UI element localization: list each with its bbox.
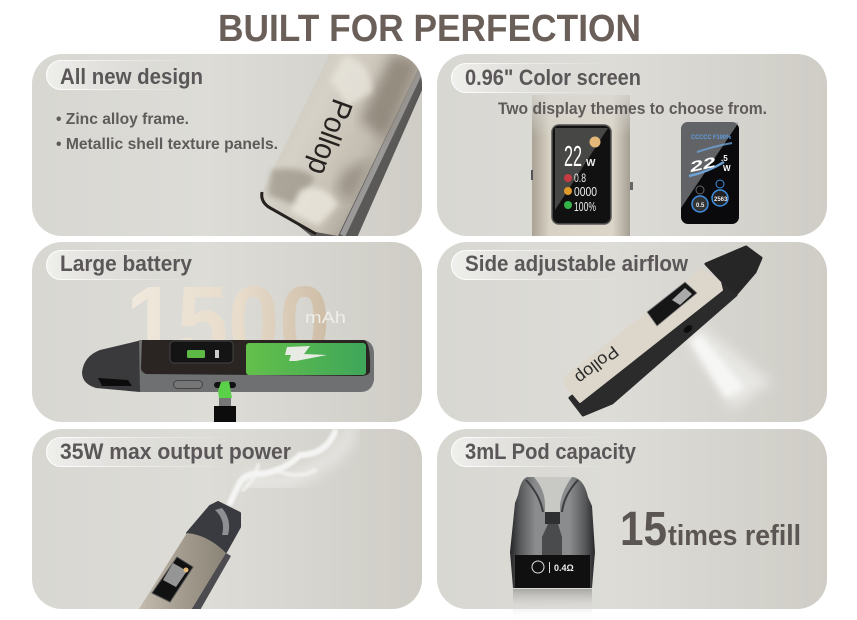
usb connector	[214, 381, 236, 422]
callout: 15 times refill	[620, 503, 801, 556]
device: angled side view	[564, 247, 761, 415]
pod	[510, 477, 595, 588]
air stream	[686, 325, 772, 410]
heading pill: output: 35W max output power	[60, 439, 291, 464]
big number 1500: 1500	[126, 266, 330, 378]
screen: theme two	[681, 122, 739, 224]
bolt icon	[285, 346, 327, 361]
device photo: shell close-up	[262, 50, 430, 240]
heading pill: color screen: 0.96" Color screen	[465, 65, 641, 90]
logo: Pollop	[301, 95, 358, 179]
screen: theme one: W	[586, 158, 596, 169]
callout: 15 times refill: times refill	[668, 520, 801, 552]
screen: theme two: 0.5	[696, 203, 705, 209]
mini screen	[170, 341, 233, 363]
title: BUILT FOR PERFECTION	[218, 8, 641, 50]
panel: pod capacity	[437, 429, 827, 620]
screen: theme one	[552, 125, 611, 224]
screen: theme one: 100%	[574, 199, 596, 214]
bullet list: • Metallic shell texture panels.	[56, 136, 278, 153]
panel: large battery	[32, 242, 422, 422]
bullet list: • Zinc alloy frame.	[56, 111, 189, 128]
callout: 15 times refill: 15	[620, 503, 667, 556]
device: charging pod	[82, 340, 374, 422]
pod: 0.4Ω	[554, 563, 574, 573]
screen: theme two: .5	[721, 154, 728, 163]
heading pill: airflow: Side adjustable airflow	[465, 251, 689, 276]
screen: theme one: 0.8	[574, 171, 586, 185]
device body behind screen	[531, 95, 633, 236]
pod reflection	[513, 589, 592, 620]
panel: 35W output	[32, 429, 422, 612]
heading pill: all new design: All new design	[60, 64, 203, 89]
panel: color screen	[437, 54, 827, 236]
device: front view	[137, 502, 240, 612]
screen: theme one: 22	[564, 141, 582, 173]
logo: Pollop	[571, 342, 622, 388]
panel: side adjustable airflow	[437, 242, 827, 422]
panel: all new design	[32, 50, 430, 240]
vapour	[230, 432, 350, 503]
unit mAh: mAh	[305, 308, 346, 327]
heading pill: large battery: Large battery	[60, 251, 193, 276]
screen: theme two: 2563	[714, 197, 728, 203]
heading pill: pod: 3mL Pod capacity	[465, 439, 637, 464]
button	[174, 380, 202, 388]
subtitle: Two display themes to choose from.	[498, 99, 767, 118]
screen: theme two: W	[723, 164, 731, 173]
bullet list	[56, 111, 278, 153]
screen: theme two: CCCCC F100%	[691, 134, 731, 141]
screen: theme two: 22	[687, 154, 717, 176]
screen: theme one: 0000	[574, 184, 597, 199]
battery panel	[246, 343, 366, 375]
